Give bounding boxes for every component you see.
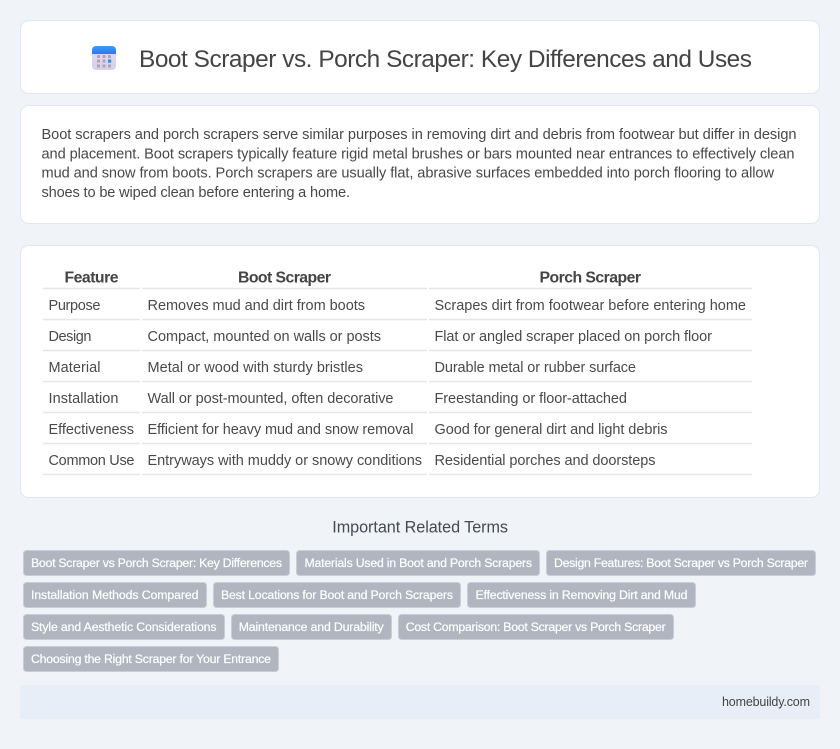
tag: [214, 582, 460, 608]
table row: common use: Residential porches and doorsteps: [434, 453, 656, 469]
table row: installation: Installation: [48, 391, 118, 407]
table row: purpose: [43, 298, 752, 320]
intro paragraph: Boot scrapers and porch scrapers serve similar purposes in removing dirt and debris from footwear but differ in design: [42, 127, 796, 143]
tag: Design Features: Boot Scraper vs Porch Scraper: [554, 556, 808, 570]
tag: [24, 614, 224, 640]
heading: related terms: Important Related Terms: [332, 519, 508, 537]
intro paragraph: shoes to be wiped clean before entering a home.: [42, 185, 350, 201]
table row: common use: Entryways with muddy or snowy conditions: [148, 453, 422, 469]
panel: comparison table: [20, 246, 820, 498]
tag: Style and Aesthetic Considerations: [31, 620, 216, 634]
tag: [398, 614, 674, 640]
footer: [20, 685, 820, 719]
table row: design: Design: [48, 329, 92, 345]
intro paragraph: [42, 127, 796, 201]
tag: Materials Used in Boot and Porch Scrapers: [304, 556, 532, 570]
table row: material: Material: [48, 360, 100, 376]
tag: Effectiveness in Removing Dirt and Mud: [476, 588, 688, 602]
title: Boot Scraper vs. Porch Scraper: Key Differences and Uses: [139, 46, 752, 73]
table row: effectiveness: Efficient for heavy mud and snow removal: [148, 422, 414, 438]
intro paragraph: and placement. Boot scrapers typically feature rigid metal brushes or bars mounted near entrances to effectively clean: [42, 146, 794, 162]
table row: purpose: Purpose: [48, 298, 100, 314]
table row: purpose: Scrapes dirt from footwear before entering home: [434, 298, 746, 314]
tag: [232, 614, 392, 640]
table row: design: Compact, mounted on walls or posts: [148, 329, 381, 345]
tag: Best Locations for Boot and Porch Scrapers: [221, 588, 453, 602]
table row: common use: [43, 453, 752, 474]
table row: design: [43, 329, 752, 350]
table header row: [43, 270, 752, 288]
tag: [24, 646, 278, 672]
table row: installation: [43, 391, 752, 412]
tag: [546, 550, 816, 576]
tag: [24, 550, 290, 576]
table row: effectiveness: Good for general dirt and light debris: [434, 422, 668, 438]
panel: introduction: [20, 106, 820, 224]
table header row: Feature: [64, 270, 119, 287]
tag: [24, 582, 206, 608]
tag: Boot Scraper vs Porch Scraper: Key Differences: [31, 556, 282, 570]
tag: [296, 550, 540, 576]
panel: related term tags: [24, 550, 816, 672]
table row: material: Durable metal or rubber surface: [434, 360, 636, 376]
table row: installation: Wall or post-mounted, often decorative: [148, 391, 394, 407]
tag: [468, 582, 696, 608]
table row: material: Metal or wood with sturdy bristles: [148, 360, 363, 376]
table row: purpose: Removes mud and dirt from boots: [148, 298, 365, 314]
header panel: [20, 20, 820, 94]
tag: Choosing the Right Scraper for Your Entrance: [31, 652, 271, 666]
tag: Maintenance and Durability: [239, 620, 385, 634]
table row: effectiveness: Effectiveness: [48, 422, 134, 438]
table row: common use: Common Use: [48, 453, 134, 469]
table header row: Boot Scraper: [238, 270, 331, 287]
table row: installation: Freestanding or floor-attached: [434, 391, 627, 407]
intro paragraph: mud and snow from boots. Porch scrapers are usually flat, abrasive surfaces embedded into porch flooring to allow: [42, 166, 774, 182]
icon: calendar: [92, 46, 116, 70]
table row: design: Flat or angled scraper placed on porch floor: [434, 329, 712, 345]
table header row: Porch Scraper: [540, 270, 641, 287]
footer: homebuildy.com: [722, 695, 810, 709]
table row: material: [43, 360, 752, 382]
tag: Cost Comparison: Boot Scraper vs Porch Scraper: [406, 620, 666, 634]
table row: effectiveness: [43, 422, 752, 444]
tag: Installation Methods Compared: [31, 588, 199, 602]
